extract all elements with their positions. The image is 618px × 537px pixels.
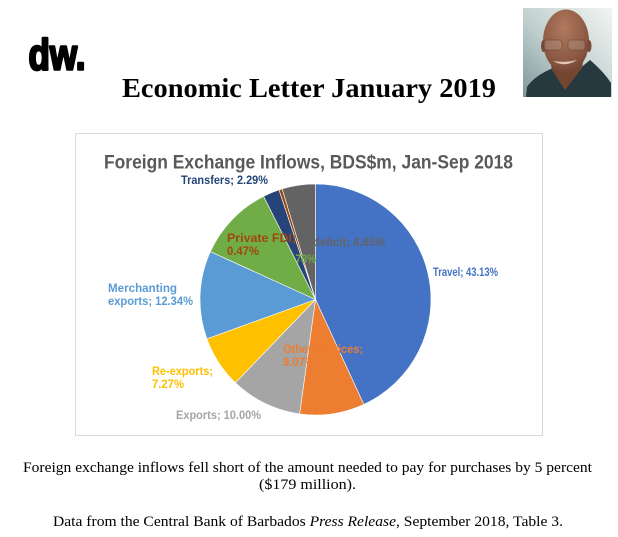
icon: smile [553,60,577,64]
slice: deficit [282,184,316,300]
chart heading: Foreign Exchange Inflows, BDS$m, Jan-Sep 2018 [104,152,513,174]
label: deficit: deficit; 4.65% [313,235,385,249]
icon: neck [550,56,584,90]
icon: ears [541,40,592,52]
slice: merchanting exports [200,252,316,339]
label: exports: Exports; 10.00% [176,408,261,422]
logo: dw: dw. [28,30,86,80]
text block: summary [23,460,592,493]
slice: travel [316,184,431,404]
label: private FDI [227,231,296,258]
panel: chart frame [76,134,542,436]
photo: portrait [523,8,612,97]
label: merchanting exports: Merchanting [108,281,177,295]
label: other services [283,342,363,369]
label: re-exports: 7.27% [152,377,184,391]
label: re-exports: Re-exports; [152,364,213,378]
slice: exports [235,300,316,414]
label: green slice value: 10.78% [281,252,316,266]
label: merchanting exports: exports; 12.34% [108,294,193,308]
icon: head [543,10,589,72]
data labels [108,173,498,422]
label: other services: 9.07% [283,355,315,369]
slice: private FDI [279,189,316,300]
label: transfers: Transfers; 2.29% [181,173,268,187]
slice: transfers [264,190,316,300]
icon: glasses [544,40,585,50]
label: private FDI: 0.47% [227,244,259,258]
pie chart [200,184,431,415]
slice: green remainder [210,196,316,300]
label: travel: Travel; 43.13% [433,265,498,279]
label: re-exports [152,364,213,391]
label: private FDI: Private FDI; [227,231,296,245]
icon: jacket [526,60,611,97]
title: Economic Letter January 2019 [122,73,496,103]
slice: other services [300,300,364,415]
text block: summary: Foreign exchange inflows fell short of the amount needed to pay for purchases by 5 percent [23,460,592,476]
text block: source: Data from the Central Bank of Barbados Press Release , September 2018, Table 3. [53,514,563,530]
label: other services: Other services; [283,342,363,356]
slice: re-exports [207,300,316,383]
text block: summary: ($179 million). [259,477,356,493]
label: merchanting exports [108,281,193,308]
